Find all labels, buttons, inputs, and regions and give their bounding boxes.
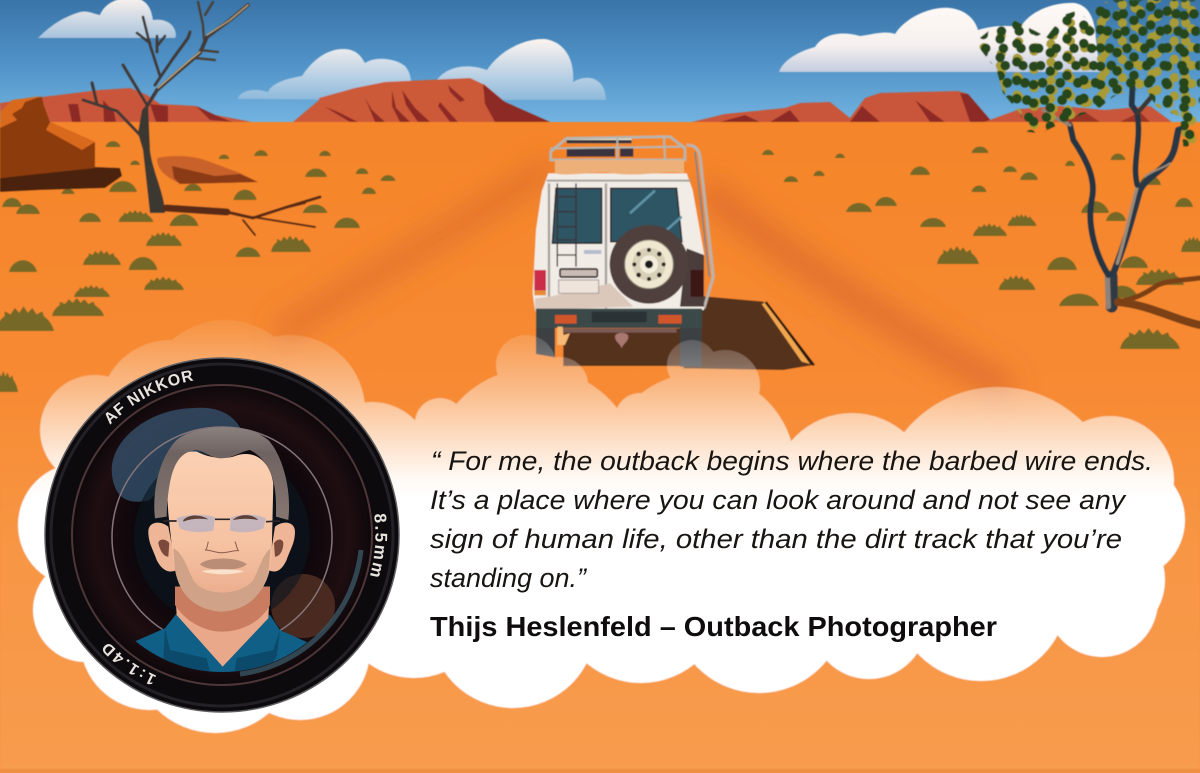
tree: gum tree <box>967 0 1200 307</box>
quote text: It’s a place where you can look around and not see any <box>430 485 1127 515</box>
lens flare: blue <box>112 408 245 502</box>
sky <box>0 0 1200 123</box>
lens reflection arc <box>240 550 361 674</box>
dirt track ruts <box>285 170 1000 385</box>
tree shadow: dead tree <box>166 197 320 235</box>
bumper <box>536 309 702 328</box>
mountains: left range <box>0 88 252 122</box>
badge and number plate <box>584 250 601 254</box>
lens label: AF NIKKOR: AF NIKKOR <box>106 370 194 425</box>
lens flare: brown <box>271 574 335 638</box>
lens rings <box>112 427 332 647</box>
nose <box>205 542 238 553</box>
roof load <box>567 138 632 143</box>
cloud: top left <box>38 0 176 38</box>
vehicle shadow <box>683 296 813 370</box>
snorkel <box>687 145 713 308</box>
attribution: Thijs Heslenfeld – Outback Photographer <box>430 611 997 642</box>
mountains: right range <box>692 91 1172 122</box>
roof rack <box>551 137 685 160</box>
rock: large left boulder <box>0 96 122 192</box>
tree trunk <box>1043 83 1190 307</box>
face <box>168 452 274 595</box>
cloud: top right <box>779 3 1100 72</box>
glasses <box>163 515 280 532</box>
tree shadow: gum tree <box>1118 278 1200 325</box>
neck <box>175 587 270 667</box>
lens portrait <box>44 357 400 713</box>
cloud lobes <box>172 320 274 358</box>
portrait <box>136 428 308 672</box>
tree foliage <box>978 0 1200 148</box>
rock: flat boulder <box>157 156 258 184</box>
quote text: sign of human life, other than the dirt track that you’re <box>430 524 1122 554</box>
quote text <box>430 446 1153 593</box>
windows <box>552 188 602 243</box>
hair <box>154 427 289 520</box>
cloud: centre left <box>238 49 411 100</box>
grass tufts <box>0 141 1200 392</box>
tree: dead tree <box>83 2 248 213</box>
body <box>533 173 704 311</box>
quote text: “ For me, the outback begins where the barbed wire ends. <box>431 446 1153 476</box>
ladder <box>557 183 576 267</box>
quote text: standing on.” <box>430 563 587 593</box>
ears <box>148 523 177 572</box>
vehicle: white 4WD <box>533 137 814 370</box>
cloud: centre right <box>437 39 606 100</box>
tail lights <box>534 270 546 291</box>
lens barrel <box>45 358 399 712</box>
speech cloud <box>18 320 1185 733</box>
wheels <box>536 323 702 367</box>
shirt <box>136 614 308 672</box>
lens label: 1:1.4D: 1:1.4D <box>103 644 156 684</box>
lens label: 8.5mm: 8.5mm <box>370 514 388 577</box>
face shading <box>173 548 271 612</box>
spare wheel <box>610 225 688 304</box>
mountains: centre mesa <box>293 78 550 122</box>
